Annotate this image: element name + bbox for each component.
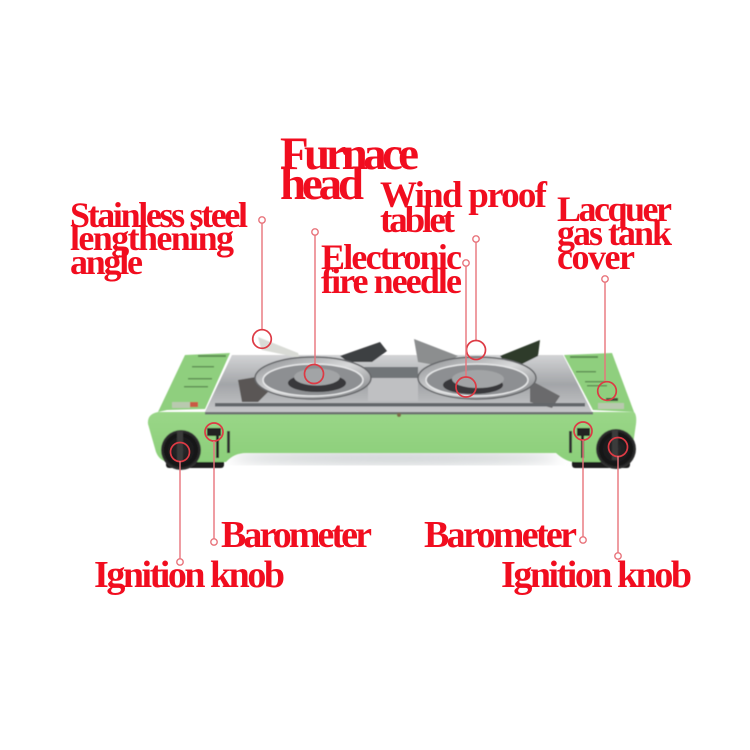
label: Wind proof tablet: tablet [380,200,456,241]
callout: left ignition knob pointer [170,442,190,565]
green front body [148,412,636,462]
front edge highlight [205,412,593,414]
label: Lacquer gas tank cover: Lacquer [557,189,672,229]
label: Furnace head: head [280,158,364,210]
label: Stainless steel lengthening angle: Stainless steel [70,195,248,235]
left foot [166,452,224,468]
label: Wind proof tablet [380,175,548,241]
label: Stainless steel lengthening angle: angle [70,242,143,282]
stainless top plate [204,355,593,414]
front left support [238,377,268,402]
plate front rail [215,403,585,406]
green right control panel [564,353,634,412]
right back pan support [340,342,387,362]
burner cap [294,368,340,386]
callout: left barometer pointer [205,423,223,545]
green left control panel [158,353,230,412]
label: Lacquer gas tank cover [557,189,672,277]
stove illustration [148,337,636,470]
left panel markings [172,355,226,408]
label: Furnace head [280,128,419,210]
label: Furnace head: Furnace [280,128,419,180]
label: Electronic fire needle: fire needle [321,261,462,301]
left burner [238,337,387,402]
front right support [530,380,560,408]
right foot [572,452,630,468]
label: Stainless steel lengthening angle: lengthening [70,218,234,258]
callout: lacquer gas tank cover pointer [598,276,616,400]
outer ring [255,357,371,399]
left ignition knob [161,430,201,470]
front centre latch [397,413,401,417]
callout: right ignition knob pointer [608,438,628,559]
callout: wind proof tablet pointer [466,236,486,360]
inner bowl [263,364,363,396]
burner cap [452,370,504,388]
burner ring [443,376,503,394]
right ignition knob [596,429,636,469]
right barometer [569,428,590,458]
label: Ignition knob right: Ignition knob [501,554,692,596]
label: Wind proof tablet: Wind proof [380,175,548,216]
burner ring [288,374,346,392]
left barometer [207,428,230,458]
label: Stainless steel lengthening angle [70,195,248,282]
right burner [414,339,560,408]
left back pan support [414,339,458,366]
left back pan support [258,337,300,358]
callout: electronic fire needle pointer [456,260,476,397]
label: Electronic fire needle [321,237,462,301]
label: Lacquer gas tank cover: gas tank [557,213,672,253]
inner bowl [426,364,528,396]
label: Ignition knob left: Ignition knob [94,554,285,596]
centre strip between burners [364,367,418,378]
plate reflection strip [368,378,418,401]
callout: stainless steel angle pointer [253,217,271,348]
label: Electronic fire needle: Electronic [321,237,462,277]
outer ring [418,357,536,399]
right back pan support [500,340,540,364]
label: Barometer left: Barometer [221,514,372,556]
right panel markings [570,356,624,409]
callout: right barometer pointer [574,422,592,543]
callout: furnace head pointer [304,229,324,384]
shadow under stove [230,452,560,464]
label: Barometer right: Barometer [424,514,577,556]
label: Lacquer gas tank cover: cover [557,237,635,277]
